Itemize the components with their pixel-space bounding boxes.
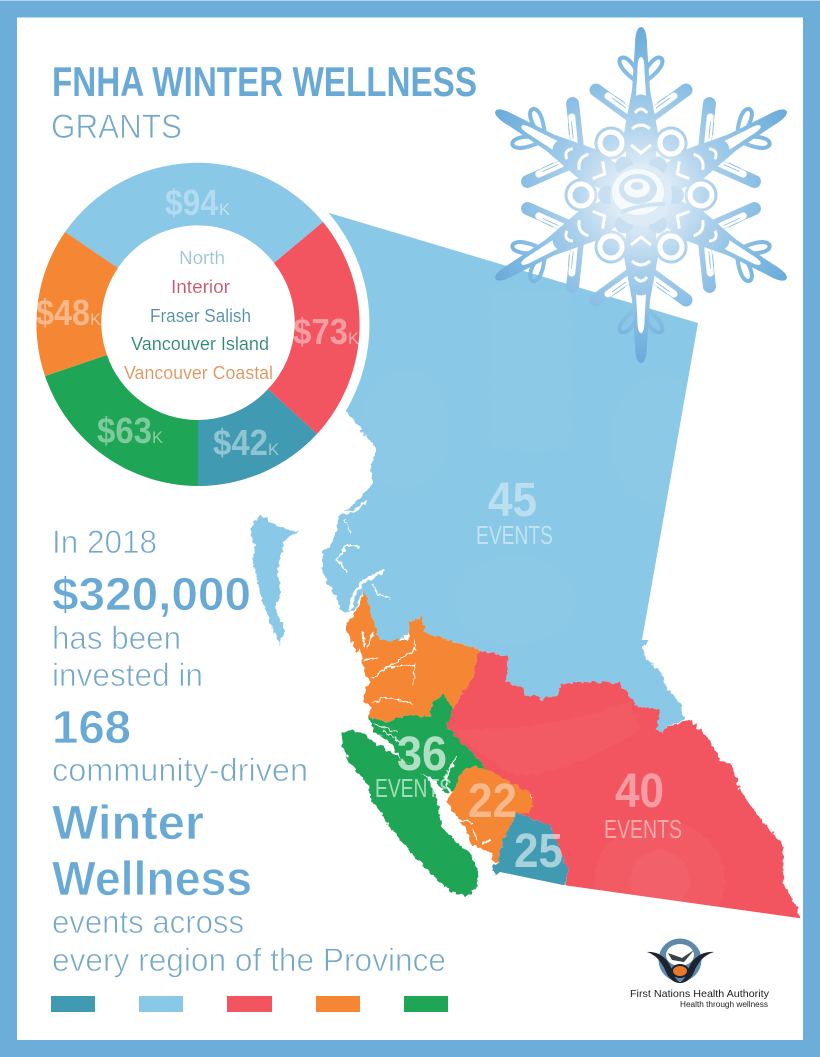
label: Interior 40 events: 40 <box>615 765 664 818</box>
summary statement: has been <box>52 620 181 656</box>
donut legend labels: Vancouver Coastal <box>124 363 273 383</box>
label: Fraser Salish 25: 25 <box>514 825 563 878</box>
region: Fraser Salish <box>490 813 568 892</box>
label: Vancouver Island 36 events: 36 <box>397 728 447 781</box>
amount: $94K: $94 <box>165 182 218 223</box>
map of BC health regions <box>250 190 802 940</box>
label: Interior 40 events: EVENTS <box>604 814 682 844</box>
region shapes with coastlines <box>250 190 802 940</box>
amount: $73K: $73 <box>293 311 348 352</box>
region: Haida Gwaii (North) <box>250 515 300 646</box>
label: Interior 40 events <box>604 765 682 844</box>
summary statement: events across <box>52 904 244 940</box>
summary statement: $320,000 <box>52 568 251 620</box>
region: Vancouver Island <box>342 730 478 897</box>
logo: First Nations Health Authority <box>630 938 770 1009</box>
amount: $73K: K <box>348 329 360 348</box>
texture: interior swirls <box>630 849 691 902</box>
amount: $63K: K <box>152 428 164 447</box>
region: Vancouver Coastal (north part) <box>347 590 479 722</box>
donut legend labels: Vancouver Island <box>131 334 269 354</box>
summary statement: Wellness <box>52 853 252 906</box>
colour legend bars <box>51 996 448 1012</box>
amount: $48K: $48 <box>36 292 90 333</box>
donut legend labels: North <box>179 248 225 268</box>
label: North 45 events: EVENTS <box>476 520 553 550</box>
summary statement: invested in <box>52 657 203 693</box>
donut legend labels <box>124 248 273 383</box>
title: GRANTS <box>51 108 182 146</box>
logo text: First Nations Health Authority <box>630 988 770 1000</box>
coastal inlets <box>337 503 490 843</box>
region: Vancouver Island (mainland) <box>368 693 488 793</box>
label: North 45 events <box>476 474 553 550</box>
amount: $42K: $42 <box>213 422 268 463</box>
region: North <box>322 212 698 734</box>
amount: $94K: K <box>219 200 231 219</box>
texture: north swirls <box>360 290 710 645</box>
logo text <box>630 988 770 1009</box>
logo text: Health through wellness <box>680 1000 768 1009</box>
donut legend labels: Fraser Salish <box>150 306 251 326</box>
title: FNHA WINTER WELLNESS <box>52 58 477 105</box>
label: Vancouver Island 36 events <box>375 728 452 803</box>
segment: Interior $73K <box>268 222 360 434</box>
label: Vancouver Coastal 22: 22 <box>468 775 517 828</box>
summary statement: Winter <box>52 797 204 850</box>
segment: Fraser Salish $42K <box>198 389 317 486</box>
segment: Vancouver Island $63K <box>45 355 198 486</box>
donut chart: grants by region <box>26 152 370 496</box>
summary statement: community-driven <box>52 752 308 788</box>
title <box>51 58 477 146</box>
donut legend labels: Interior <box>171 277 230 297</box>
amount: $42K: K <box>268 440 280 459</box>
summary statement: In 2018 <box>52 524 157 560</box>
segment: Vancouver Coastal $48K <box>36 232 118 376</box>
icon: eagle emblem <box>647 938 714 983</box>
snowflake <box>473 27 809 363</box>
amount: $63K: $63 <box>97 410 152 451</box>
region: Interior <box>447 650 802 930</box>
label: North 45 events: 45 <box>488 474 537 527</box>
summary statement: every region of the Province <box>52 942 446 978</box>
summary statement <box>52 524 446 978</box>
region: Vancouver Coastal (south part) <box>447 765 533 862</box>
segment: North $94K <box>65 163 323 268</box>
amount: $48K: K <box>90 310 102 329</box>
summary statement: 168 <box>52 701 131 753</box>
label: Vancouver Island 36 events: EVENTS <box>375 773 452 803</box>
